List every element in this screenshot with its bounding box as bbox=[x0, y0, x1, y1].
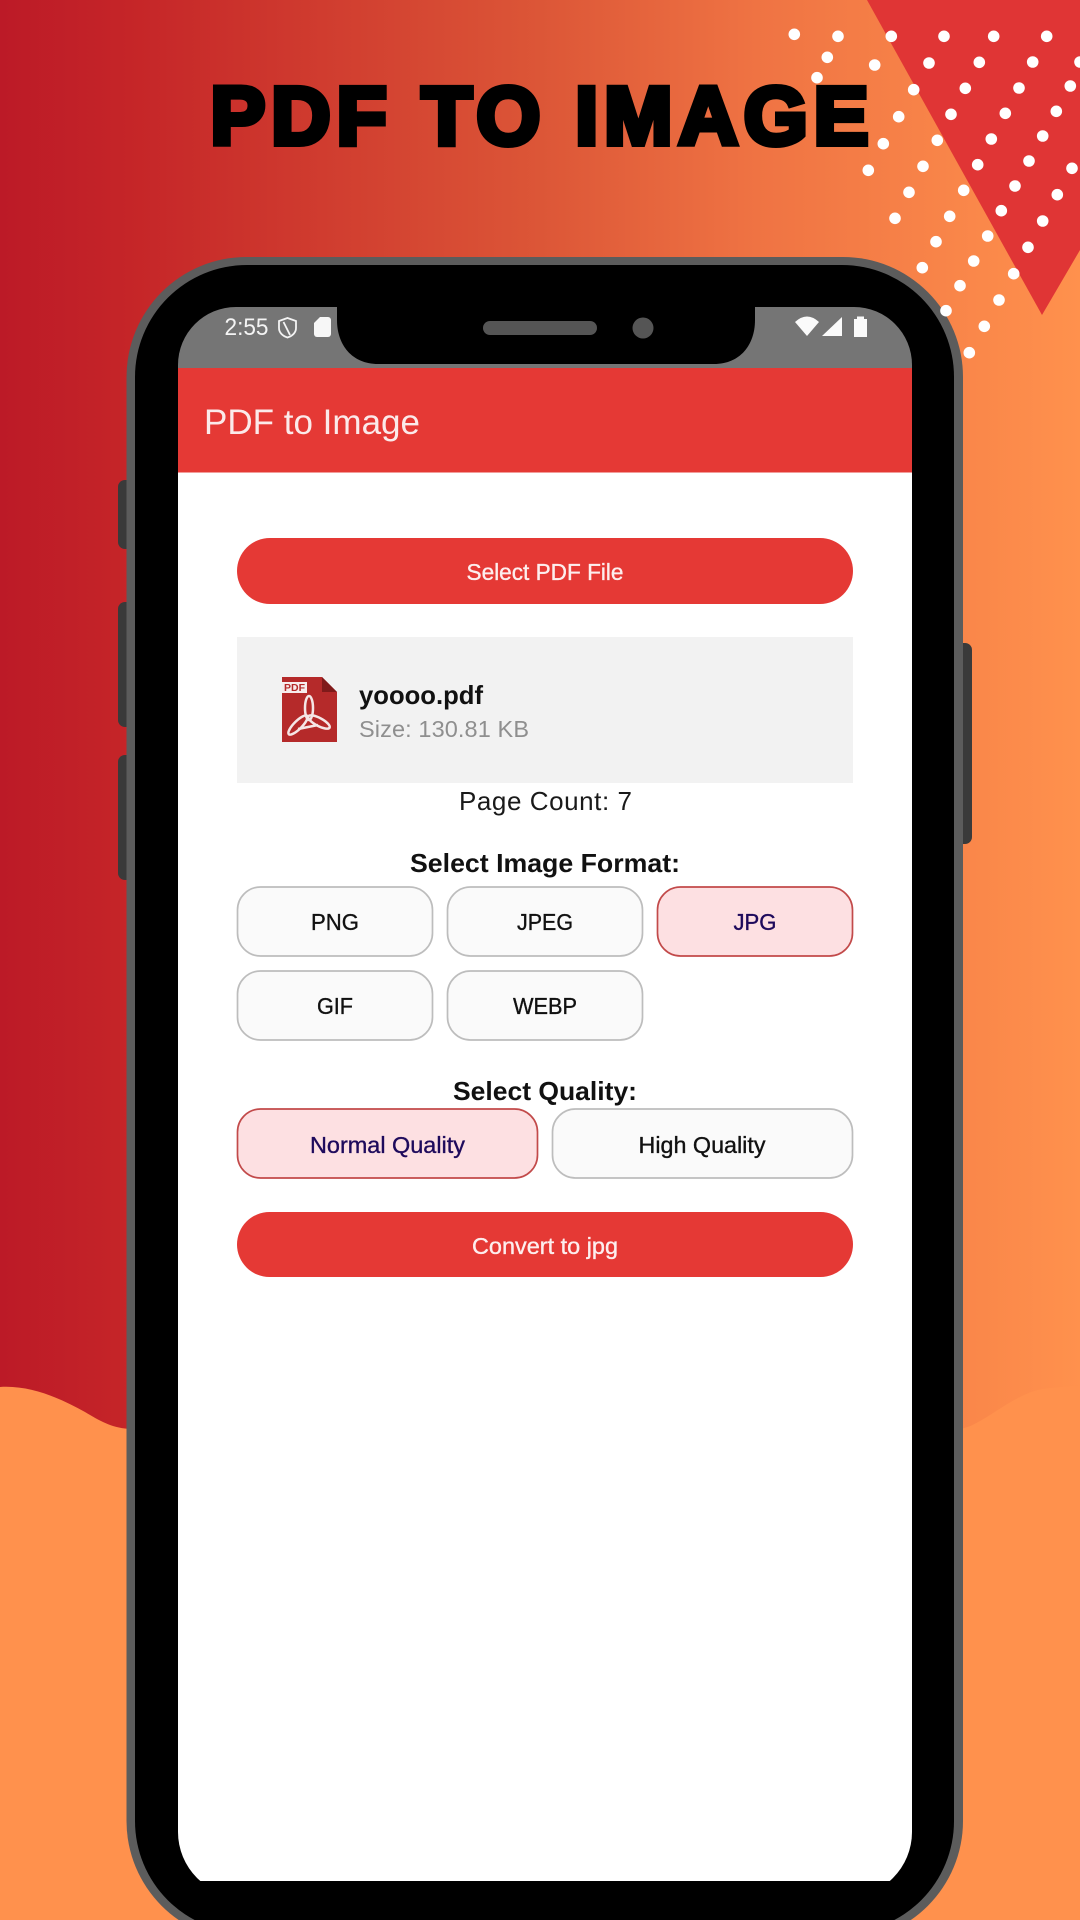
option JPG selected: JPG bbox=[734, 909, 776, 935]
option JPG selected bbox=[658, 887, 852, 956]
option normal quality selected: Normal Quality bbox=[310, 1132, 465, 1158]
status bar left: time and icons: 2:55 bbox=[224, 314, 268, 341]
decorative red triangle bbox=[867, 0, 1080, 315]
quality heading: Select Quality: bbox=[453, 1076, 637, 1106]
convert button bbox=[237, 1212, 853, 1277]
option JPEG bbox=[448, 887, 642, 956]
camera bbox=[632, 318, 654, 338]
page count: Page Count: 7 bbox=[459, 786, 632, 816]
option WEBP: WEBP bbox=[513, 993, 577, 1019]
app bar title: PDF to Image bbox=[204, 403, 420, 442]
quality options bbox=[238, 1109, 852, 1178]
option GIF: GIF bbox=[317, 993, 353, 1019]
convert button: Convert to jpg bbox=[472, 1233, 618, 1259]
option PNG bbox=[238, 887, 432, 956]
phone side buttons bbox=[118, 480, 972, 880]
app bar bbox=[178, 368, 912, 472]
option high quality bbox=[552, 1109, 852, 1178]
PDF file icon bbox=[282, 677, 337, 742]
screen content background bbox=[178, 472, 912, 1897]
option JPEG: JPEG bbox=[517, 909, 573, 935]
option GIF bbox=[238, 971, 432, 1040]
orange wave footer bbox=[0, 1385, 1080, 1920]
format heading: Select Image Format: bbox=[410, 848, 680, 878]
file info card bbox=[237, 637, 853, 783]
file name: yoooo.pdf bbox=[359, 680, 483, 710]
status bar left: time and icons bbox=[224, 314, 331, 341]
option WEBP bbox=[448, 971, 642, 1040]
format options bbox=[238, 887, 852, 1040]
navigation strip bbox=[178, 1881, 912, 1898]
file size: Size: 130.81 KB bbox=[359, 716, 529, 742]
status bar background bbox=[178, 307, 912, 368]
status bar right: system icons bbox=[795, 316, 867, 337]
select PDF button bbox=[237, 538, 853, 604]
option normal quality selected bbox=[238, 1109, 538, 1178]
select PDF button: Select PDF File bbox=[466, 559, 624, 585]
speaker bbox=[483, 321, 597, 335]
option PNG: PNG bbox=[311, 909, 359, 935]
option high quality: High Quality bbox=[638, 1132, 766, 1158]
decorative white dots bbox=[788, 28, 1080, 359]
main title: PDF TO IMAGE bbox=[210, 71, 868, 162]
phone bezel bbox=[135, 265, 954, 1920]
PDF file icon: PDF bbox=[284, 682, 306, 694]
phone frame bbox=[126, 257, 963, 1920]
notch bbox=[337, 295, 755, 364]
phone mockup bbox=[126, 257, 963, 1920]
